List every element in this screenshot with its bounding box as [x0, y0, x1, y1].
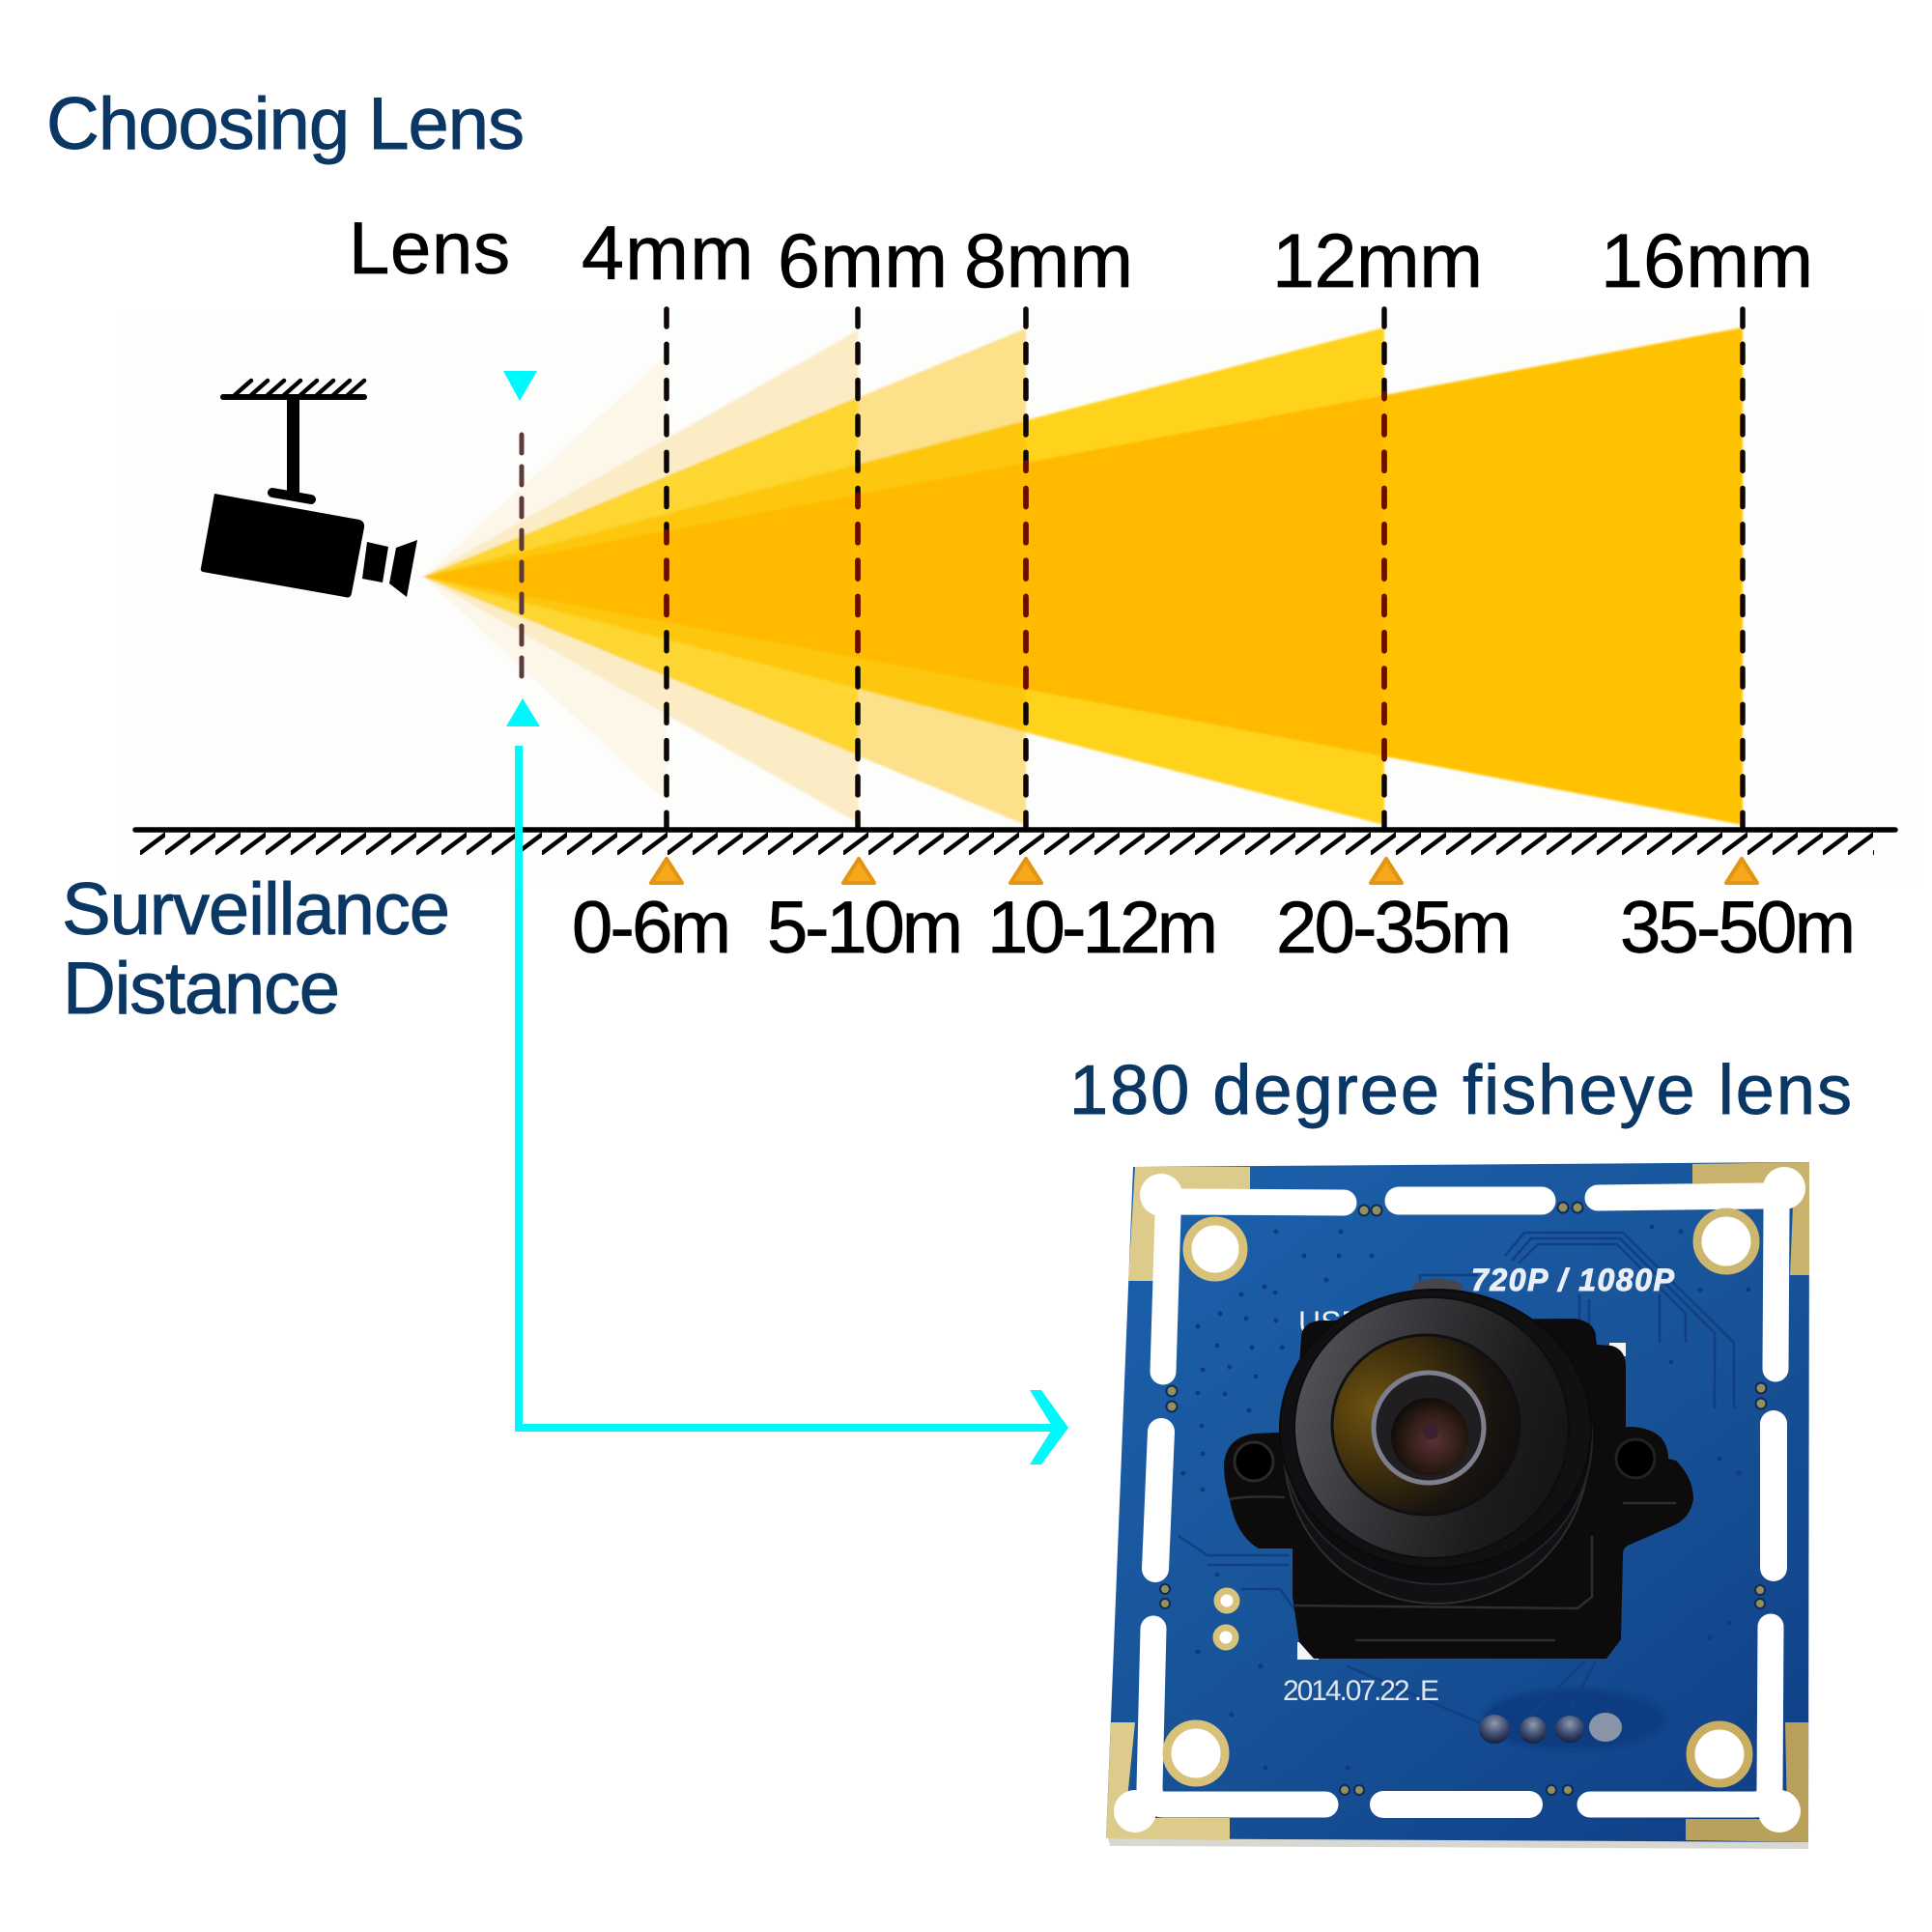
board traces [1179, 1233, 1734, 1724]
fisheye lens [1280, 1279, 1592, 1604]
lens width marker: dashed line [520, 435, 524, 682]
darker patch under solder pads [1483, 1689, 1666, 1750]
board text: USB: USB [1298, 1305, 1362, 1340]
board vias [1160, 1202, 1766, 1795]
lens size labels: 6mm [778, 217, 948, 303]
board text: resolution: 720P / 1080P [1471, 1263, 1675, 1297]
distance markers [651, 859, 1757, 883]
cyan marker triangle pointing down [503, 371, 537, 401]
board surface dots [1180, 1225, 1750, 1770]
icon: ceiling mounted security camera [201, 381, 417, 597]
lens size labels: 4mm [582, 210, 753, 296]
lens size labels: 16mm [1601, 217, 1813, 303]
circuit board [1106, 1162, 1809, 1849]
distance range labels: 5-10m [767, 887, 963, 969]
surveillance distance label [62, 868, 450, 1030]
lens size labels: 12mm [1272, 217, 1483, 303]
solder pads [1479, 1713, 1622, 1744]
field of view cones [423, 327, 1743, 825]
distance range labels: 0-6m [572, 887, 731, 969]
lens holder [1224, 1319, 1693, 1659]
ground line with hatching [135, 830, 1895, 855]
lens position dashed markers [667, 309, 1743, 830]
corner holes [1114, 1167, 1805, 1833]
panel: field of view diagram [116, 309, 1922, 889]
distance range labels: 10-12m [987, 887, 1218, 969]
cyan arrow to fisheye lens [519, 746, 1068, 1464]
board slots [1150, 1196, 1776, 1804]
surveillance distance label: Surveillance [62, 868, 450, 951]
distance range labels: 20-35m [1276, 887, 1512, 969]
surveillance distance label: Distance [63, 948, 340, 1030]
distance range labels: 35-50m [1620, 887, 1856, 969]
lens size labels [582, 210, 1813, 303]
lens row label: Lens [349, 208, 510, 290]
distance range labels [572, 887, 1856, 969]
lens size labels: 8mm [964, 217, 1133, 303]
board text: date code: 2014.07.22 .E [1283, 1675, 1439, 1707]
cyan marker triangle pointing up [506, 698, 540, 726]
white board exposed beside the holder [1297, 1343, 1626, 1660]
title: Choosing Lens [46, 83, 525, 165]
fisheye lens heading: 180 degree fisheye lens [1069, 1052, 1852, 1129]
gold edge plating [1106, 1162, 1809, 1842]
gold mounting rings [1167, 1212, 1755, 1783]
photo: camera board with fisheye lens [1106, 1162, 1809, 1849]
